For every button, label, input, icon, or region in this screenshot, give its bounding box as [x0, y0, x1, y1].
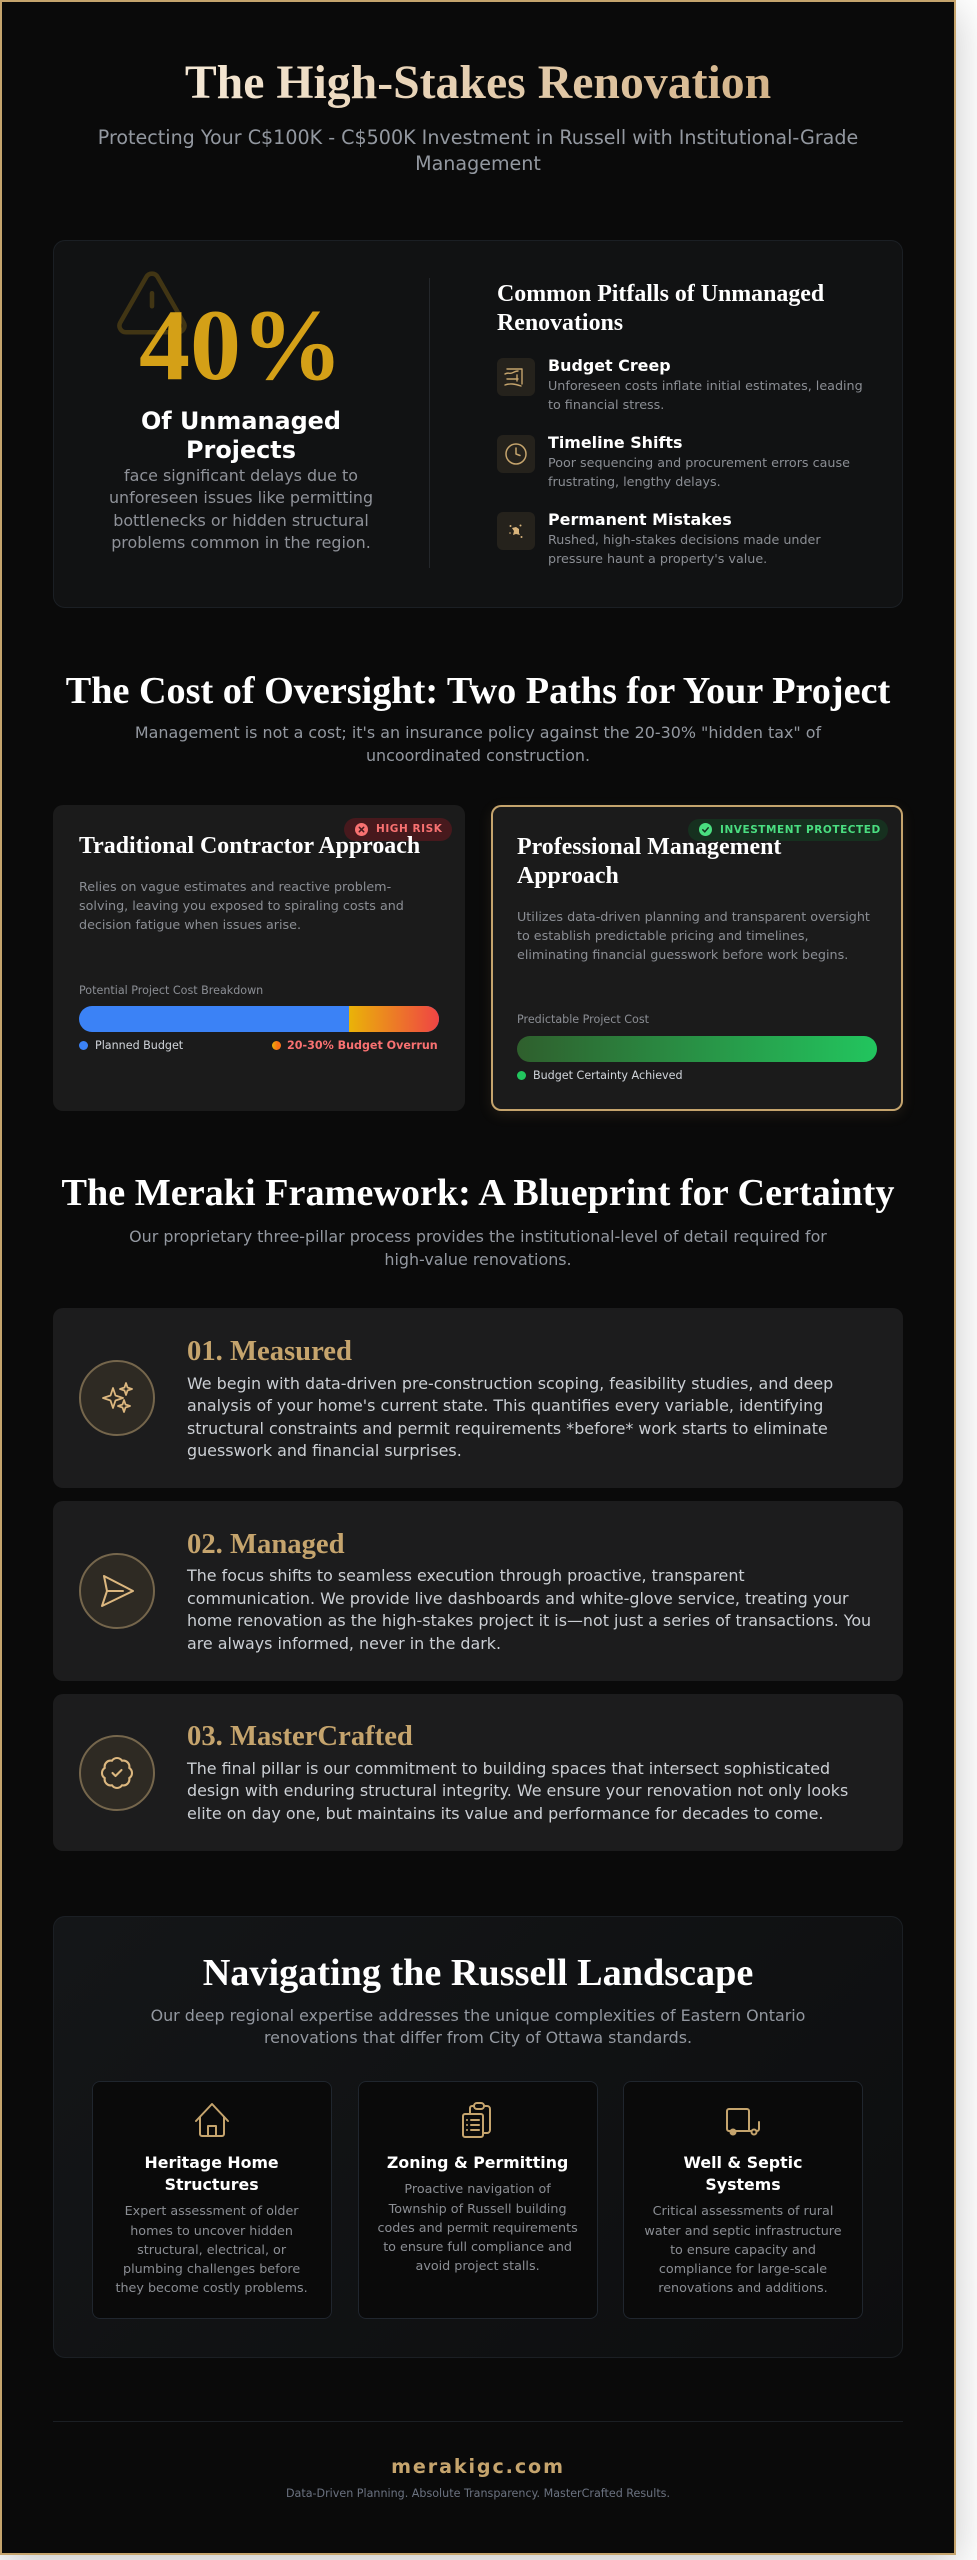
cost of oversight subtitle: uncoordinated construction. [366, 746, 590, 765]
footer: tagline: Data-Driven Planning. Absolute Transparency. MasterCrafted Results. [286, 2487, 670, 2500]
pillar body: elite on day one, but maintains its value and performance for decades to come. [187, 1804, 823, 1823]
card description: Proactive navigation of [404, 2182, 551, 2197]
pitfall description [548, 532, 821, 567]
pillar body: communication. We provide live dashboards and white-glove service, treating your [187, 1589, 849, 1608]
card: heritage home structures [92, 2081, 332, 2319]
card description: compliance for large-scale [659, 2262, 827, 2277]
pillar body: We begin with data-driven pre-construction scoping, feasibility studies, and deep [187, 1374, 833, 1393]
stacked cost bar [79, 1006, 439, 1032]
legend: budget certainty: Budget Certainty Achieved [533, 1069, 683, 1082]
card: well and septic systems [623, 2081, 863, 2319]
statistic description: problems common in the region. [111, 533, 371, 552]
bar label: Potential Project Cost Breakdown [79, 984, 263, 997]
card description: structural, electrical, or [137, 2243, 286, 2258]
pillar body: design with enduring structural integrity. We ensure your renovation not only looks [187, 1781, 848, 1800]
pitfall description: to financial stress. [548, 398, 664, 413]
footer: website: merakigc.com [391, 2454, 565, 2478]
card description: homes to uncover hidden [130, 2224, 293, 2239]
pillar body: The final pillar is our commitment to building spaces that intersect sophisticated [187, 1759, 830, 1778]
card description [79, 880, 404, 933]
card title: Heritage Home [145, 2153, 279, 2172]
badge label: INVESTMENT PROTECTED [720, 824, 881, 836]
card description: they become costly problems. [116, 2281, 308, 2296]
icon: tank [726, 2108, 760, 2136]
icon: x circle [355, 823, 368, 836]
card description [377, 2182, 578, 2274]
pitfall description: Unforeseen costs inflate initial estimates, leading [548, 379, 863, 394]
card description: to establish predictable pricing and timelines, [517, 929, 808, 944]
pillar title: 02. Managed [187, 1528, 345, 1560]
pitfall description [548, 456, 850, 490]
card heading: Traditional Contractor Approach [79, 833, 420, 859]
icon: burst [497, 512, 535, 550]
statistic description: unforeseen issues like permitting [109, 488, 373, 507]
statistic description [109, 466, 373, 552]
pitfall: budget creep [497, 356, 863, 413]
badge label: HIGH RISK [376, 823, 442, 835]
card description [116, 2204, 308, 2296]
icon: clipboard list [462, 2102, 491, 2138]
pitfall description: pressure haunt a property's value. [548, 552, 767, 567]
card description: Township of Russell building [389, 2202, 567, 2217]
card description: Expert assessment of older [125, 2204, 299, 2219]
card title: Well & Septic [684, 2153, 802, 2172]
framework subtitle: high-value renovations. [384, 1250, 572, 1269]
predictable cost bar [517, 1036, 877, 1062]
statistic caption heading [141, 407, 341, 464]
russell subtitle: Our deep regional expertise addresses the unique complexities of Eastern Ontario [151, 2006, 805, 2025]
framework subtitle: Our proprietary three-pillar process provides the institutional-level of detail required for [129, 1227, 827, 1246]
pitfalls heading: Common Pitfalls of Unmanaged [497, 281, 824, 307]
heading: cost of oversight: The Cost of Oversight: Two Paths for Your Project [66, 670, 890, 712]
icon: budget creep [497, 358, 535, 396]
bar label: Predictable Project Cost [517, 1013, 649, 1026]
pillar body: analysis of your home's current state. This quantifies every variable, identifying [187, 1396, 823, 1415]
card title [145, 2153, 279, 2194]
russell subtitle: renovations that differ from City of Ottawa standards. [264, 2028, 692, 2047]
overrun segment [349, 1006, 439, 1032]
subtitle [98, 126, 858, 174]
pillar body: home renovation as the high-stakes project it is—not just a series of transactions. You [187, 1611, 871, 1630]
card heading: Approach [517, 863, 619, 889]
card: zoning and permitting [358, 2081, 598, 2319]
statistic caption heading: Of Unmanaged [141, 407, 341, 435]
card title: Zoning & Permitting [387, 2153, 568, 2172]
pillar body: The focus shifts to seamless execution through proactive, transparent [187, 1566, 745, 1585]
heading: russell landscape: Navigating the Russell Landscape [203, 1952, 753, 1994]
icon: clock [497, 434, 535, 472]
panel: navigating the russell landscape [53, 1916, 903, 2358]
cost of oversight subtitle [135, 723, 822, 765]
panel: pillar 03 mastercrafted [53, 1694, 903, 1851]
card heading [517, 834, 782, 889]
pitfall description [548, 379, 863, 413]
panel: professional management approach [491, 805, 903, 1111]
pillar body [186, 1759, 848, 1823]
statistic: 40%: 40% [139, 289, 343, 402]
card title: Structures [165, 2175, 259, 2194]
card title [684, 2153, 802, 2194]
pillar body [187, 1374, 833, 1460]
card description [517, 910, 870, 963]
card description: to ensure capacity and [670, 2243, 816, 2258]
icon: check circle [699, 823, 712, 836]
pitfall description: Poor sequencing and procurement errors cause [548, 456, 850, 470]
card description: plumbing challenges before [123, 2262, 300, 2277]
badge: investment protected [688, 819, 888, 841]
card description: renovations and additions. [658, 2281, 828, 2296]
statistic description: bottlenecks or hidden structural [113, 511, 369, 530]
card title: Systems [705, 2175, 781, 2194]
panel: traditional contractor approach [53, 805, 465, 1111]
card description: to ensure full compliance and [383, 2240, 572, 2255]
panel: pillar 02 managed [53, 1501, 903, 1681]
card description: solving, leaving you exposed to spiraling costs and [79, 899, 404, 914]
legend: planned budget: Planned Budget [95, 1039, 183, 1052]
pitfalls heading [497, 281, 824, 336]
cost of oversight subtitle: Management is not a cost; it's an insurance policy against the 20-30% "hidden tax" of [135, 723, 821, 742]
title: The High-Stakes Renovation [185, 56, 771, 109]
card description: Critical assessments of rural [653, 2204, 833, 2219]
card description [644, 2204, 842, 2296]
panel: unmanaged projects statistic and pitfalls [53, 240, 903, 608]
pillar title: 01. Measured [187, 1334, 352, 1366]
pillar body: are always informed, never in the dark. [187, 1634, 501, 1653]
badge: high risk [344, 818, 452, 841]
card description: eliminating financial guesswork before work begins. [517, 948, 848, 963]
pillar body: guesswork and financial surprises. [187, 1441, 462, 1460]
heading: meraki framework: The Meraki Framework: A Blueprint for Certainty [62, 1172, 894, 1214]
russell subtitle [151, 2006, 805, 2047]
card description: Relies on vague estimates and reactive problem- [79, 880, 391, 895]
pitfalls heading: Renovations [497, 310, 623, 336]
pitfall: timeline shifts [497, 432, 850, 490]
pillar body: structural constraints and permit requirements *before* work starts to eliminate [187, 1419, 828, 1438]
icon: warning triangle [117, 271, 187, 334]
card description: decision fatigue when issues arise. [79, 918, 301, 933]
panel: pillar 01 measured [53, 1308, 903, 1488]
pitfall title: Permanent Mistakes [548, 510, 732, 528]
card description: water and septic infrastructure [644, 2224, 842, 2239]
pitfall title: Budget Creep [548, 356, 671, 375]
card description: avoid project stalls. [416, 2259, 540, 2274]
icon: paper plane [79, 1553, 155, 1629]
pillar body [186, 1566, 871, 1653]
icon: house [195, 2103, 229, 2137]
legend: budget overrun: 20-30% Budget Overrun [287, 1039, 438, 1052]
framework subtitle [129, 1227, 827, 1269]
pitfall: permanent mistakes [497, 510, 821, 567]
icon: sparkles [79, 1360, 155, 1436]
subtitle: Protecting Your C$100K - C$500K Investment in Russell with Institutional-Grade [98, 126, 858, 148]
card heading: Professional Management [517, 834, 781, 860]
subtitle: Management [415, 152, 541, 174]
statistic caption heading: Projects [186, 436, 296, 464]
pitfall description: frustrating, lengthy delays. [548, 475, 721, 490]
pitfall description: Rushed, high-stakes decisions made under [548, 532, 821, 548]
card description: Utilizes data-driven planning and transparent oversight [517, 910, 870, 925]
pitfall title: Timeline Shifts [548, 432, 682, 452]
statistic description: face significant delays due to [124, 466, 358, 485]
icon: badge check [79, 1734, 155, 1810]
card description: codes and permit requirements [377, 2221, 578, 2236]
pillar title: 03. MasterCrafted [187, 1720, 413, 1752]
